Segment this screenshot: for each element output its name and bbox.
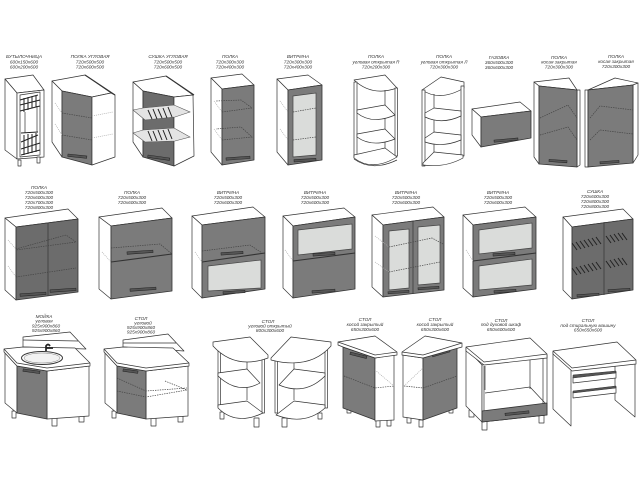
cabinet: double door shelf: 720х500х300 [25, 190, 53, 195]
cabinet: two lift doors: 720х500х300 [118, 195, 146, 200]
cabinet: slanted closed shelf left [534, 55, 580, 167]
cabinet: shelf: 720х300х300 [216, 60, 244, 64]
base: corner table: угловой [133, 320, 152, 326]
cabinet: display with upper glass: 720х600х300 [301, 200, 329, 205]
base: oven table: под духовой шкаф [481, 321, 521, 327]
base: corner table: 925х900х860 [127, 330, 155, 334]
base: open corner tables [213, 319, 331, 427]
cabinet: bottle holder [5, 54, 44, 166]
cabinet: slanted closed shelf right: 720х300х300 [602, 64, 630, 69]
open corner shelf right [351, 54, 400, 166]
base: slanted closed table left: СТОЛ [359, 317, 372, 322]
cabinet: display with two glass lifts: ВИТРИНА [487, 190, 509, 195]
cabinet: double door shelf [5, 185, 78, 300]
open corner shelf right: 720х200х300 [362, 64, 390, 70]
cabinet: display case: ВИТРИНА [287, 54, 309, 59]
cabinet: corner spoon shelf [52, 54, 115, 165]
cabinet: display case: 720х400х300 [284, 64, 312, 70]
cabinet: display with two glass lifts: 720х600х300 [484, 200, 512, 205]
base: oven table [466, 318, 547, 430]
cabinet: double door dish dryer: 720х600х300 [581, 194, 609, 199]
base: open corner tables: 800х300х600 [256, 328, 284, 333]
base: corner sink: МОЙКА [36, 312, 52, 319]
cabinet: display case [277, 54, 322, 165]
cabinet: bottle holder: 600х200х600 [10, 64, 38, 70]
open corner shelf left: угловая открытая Л [420, 60, 468, 64]
cabinet: display with upper glass: 720х500х300 [301, 195, 329, 200]
cabinet: corner dish dryer: СУШКА УГЛОВАЯ [148, 54, 188, 59]
cabinet: gas column box [472, 55, 531, 147]
base: washing machine table: 650х650х600 [574, 328, 602, 332]
base: open corner tables: угловой открытый [247, 322, 292, 328]
base: slanted closed table right: СТОЛ [429, 317, 442, 322]
base: washing machine table: под стиральную машину [560, 323, 616, 328]
cabinet: double door dish dryer: 720х800х300 [581, 199, 609, 204]
cabinet: double door shelf: ПОЛКА [31, 185, 47, 190]
base: slanted closed table right: косой закрытый [417, 321, 454, 327]
cabinet: double door dish dryer: СУШКА [587, 189, 603, 194]
base: corner table [104, 316, 189, 426]
cabinet: two lift doors: 720х600х300 [118, 200, 146, 205]
open corner shelf right: угловая открытая R [351, 60, 400, 64]
cabinet: corner dish dryer: 720х500х500 [154, 60, 182, 64]
cabinet: corner dish dryer: 720х600х500 [154, 64, 182, 70]
base: slanted closed table left: 650х300х600 [351, 327, 379, 332]
cabinet: corner spoon shelf: ПОЛКА УГЛОВАЯ [71, 54, 110, 59]
cabinet: double door shelf: 720х700х300 [25, 200, 53, 205]
cabinet: double door display [372, 190, 444, 297]
cabinet: display with lower glass: 720х600х300 [214, 200, 242, 205]
cabinet: shelf [211, 54, 254, 165]
base: corner table: СТОЛ [135, 316, 148, 321]
cabinet: display with upper glass [283, 190, 355, 298]
cabinet: display with two glass lifts [463, 190, 536, 297]
cabinet: gas column box: ГАЗОВКА [489, 55, 509, 60]
cabinet: slanted closed shelf right: ПОЛКА [608, 54, 624, 59]
cabinet: slanted closed shelf left: 720х300х300 [545, 64, 573, 70]
base: slanted closed table right: 650х300х600 [421, 327, 449, 332]
base: corner sink: 925х900х860 [32, 324, 60, 328]
cabinet: display with lower glass [192, 190, 265, 298]
cabinet: display case: 720х300х300 [284, 60, 312, 64]
cabinet: bottle holder: БУТЫЛОЧНИЦА [6, 54, 42, 59]
open corner shelf left: ПОЛКА [436, 54, 452, 59]
base: corner table: 925х900х860 [127, 325, 155, 330]
cabinet: double door display: 720х500х300 [392, 195, 420, 200]
base: corner sink: 925х900х860 [32, 328, 60, 333]
cabinet: double door display: ВИТРИНА [395, 190, 417, 195]
cabinet: two lift doors: ПОЛКА [124, 190, 140, 195]
cabinet: corner spoon shelf: 720х600х500 [76, 64, 104, 70]
open corner shelf right: ПОЛКА [368, 54, 384, 59]
base: oven table: 650х600х600 [487, 327, 515, 332]
base: slanted closed table left [338, 317, 397, 427]
open corner shelf left: 720х300х300 [430, 64, 458, 70]
cabinet: slanted closed shelf right [585, 54, 638, 167]
base: slanted closed table right [402, 317, 462, 427]
cabinet: two lift doors [99, 190, 172, 299]
base: washing machine table: СТОЛ [582, 318, 595, 323]
cabinet: double door shelf: 720х800х300 [25, 205, 53, 210]
base: washing machine table [553, 318, 636, 426]
base: corner sink [4, 312, 90, 426]
cabinet: double door display: 720х600х300 [392, 200, 420, 205]
cabinet: corner dish dryer [133, 54, 194, 166]
cabinet: display with lower glass: ВИТРИНА [217, 190, 239, 195]
cabinet: slanted closed shelf left: косая закрытая [541, 60, 577, 64]
cabinet: corner spoon shelf: 720х500х500 [76, 60, 104, 64]
cabinet: shelf: 720х400х300 [216, 64, 244, 70]
cabinet: display with lower glass: 720х500х300 [214, 195, 242, 200]
cabinet: shelf: ПОЛКА [222, 54, 238, 59]
cabinet: double door shelf: 720х600х300 [25, 195, 53, 200]
cabinet: slanted closed shelf right: косая закрытая [598, 59, 634, 64]
cabinet: double door dish dryer [563, 189, 633, 299]
cabinet: double door dish dryer: 720х800х300 [581, 204, 609, 209]
base: slanted closed table left: косой закрытый [347, 321, 384, 327]
open corner shelf left [420, 54, 468, 166]
cabinet: display with upper glass: ВИТРИНА [304, 190, 326, 195]
cabinet: bottle holder: 600х150х600 [10, 60, 38, 64]
base: corner sink: угловая [34, 318, 53, 324]
cabinet: gas column box: 360х500х300 [485, 60, 513, 65]
cabinet: display with two glass lifts: 720х500х300 [484, 195, 512, 200]
base: oven table: СТОЛ [495, 318, 508, 323]
base: open corner tables: СТОЛ [262, 319, 275, 324]
cabinet: gas column box: 360х600х300 [485, 65, 513, 70]
cabinet: slanted closed shelf left: ПОЛКА [551, 55, 567, 60]
